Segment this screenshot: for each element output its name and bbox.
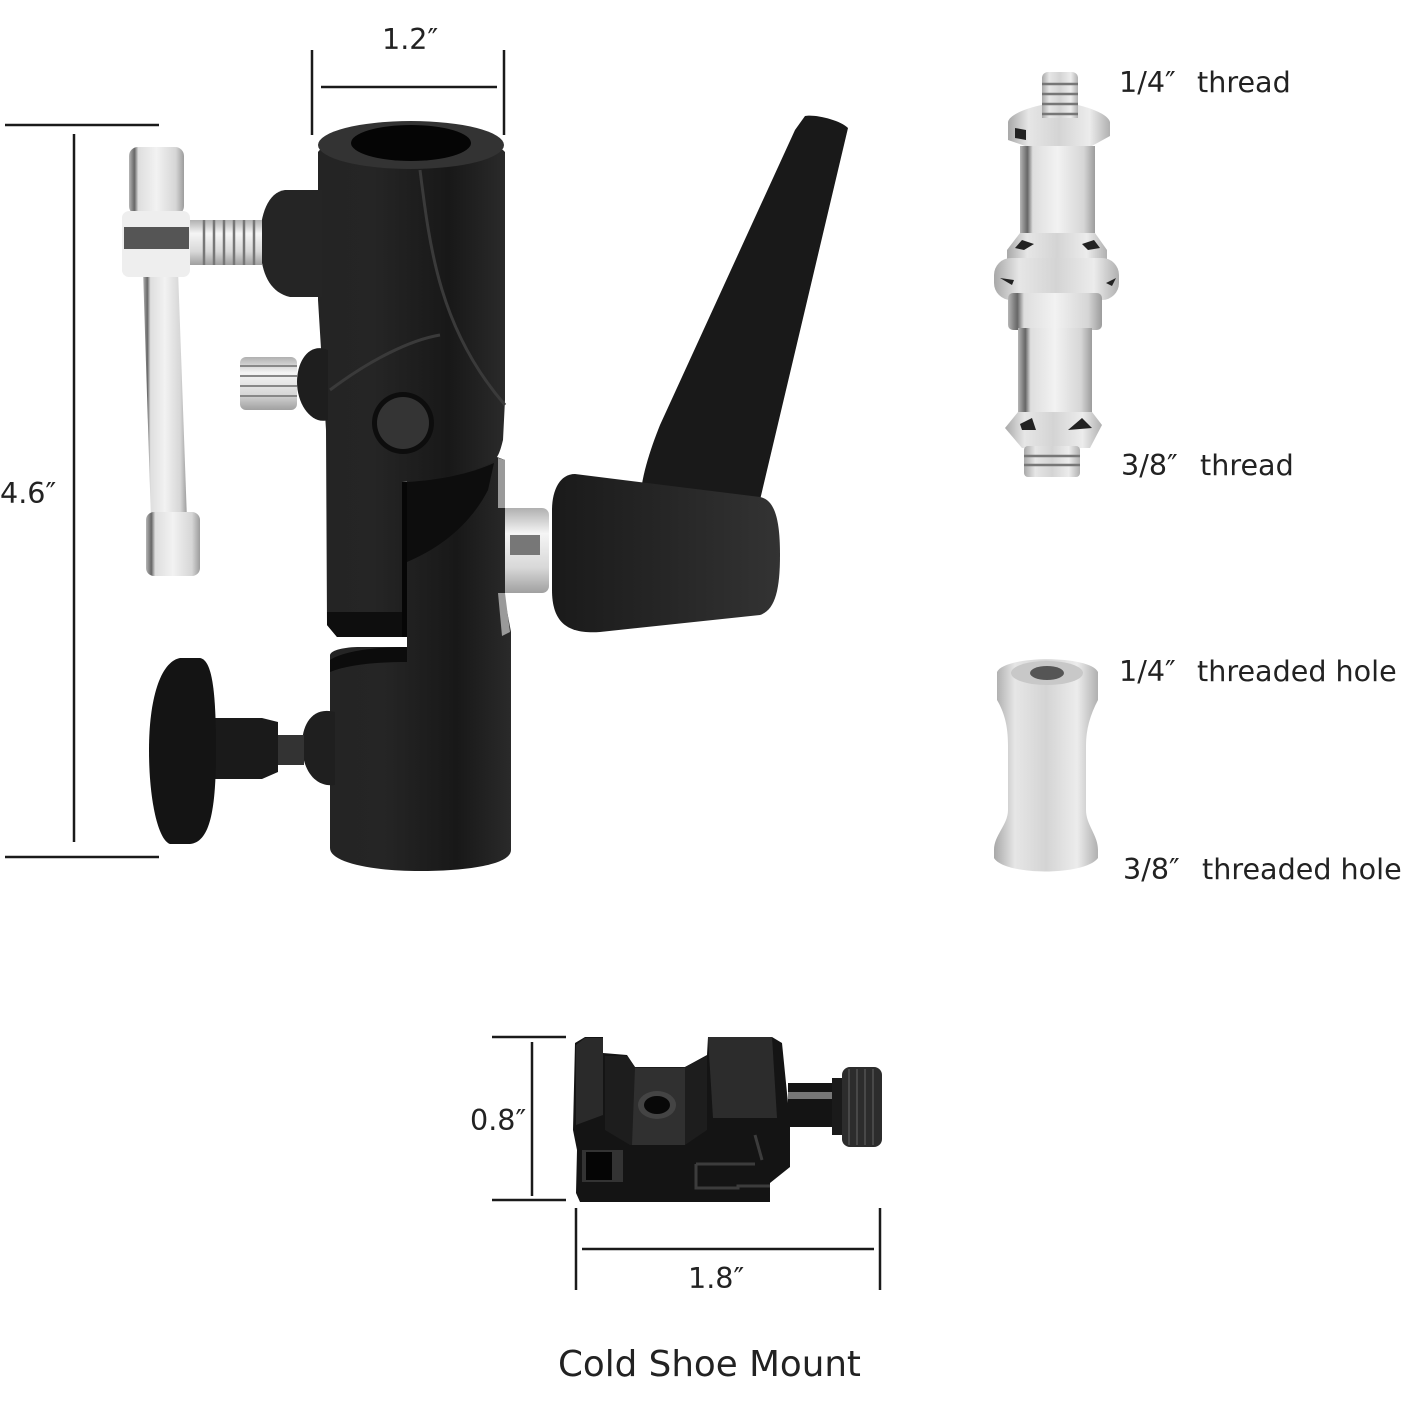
top block <box>708 1037 777 1118</box>
T-screw collar <box>122 211 190 277</box>
knob shaft <box>788 1083 834 1127</box>
middle knob boss <box>297 348 328 421</box>
dark chrome reflections <box>1000 128 1116 430</box>
left rail face <box>576 1038 603 1125</box>
adapter body <box>994 659 1098 872</box>
photo: swivel light stand bracket <box>122 116 848 871</box>
dimension: 1.8 inch width <box>576 1208 880 1295</box>
lower shaft <box>1018 328 1092 416</box>
lower screw <box>272 735 304 765</box>
label: 3/8 inch thread: thread <box>1200 448 1294 482</box>
label: 1/4 inch thread: 1/4″ <box>1119 65 1176 99</box>
label: 3/8 inch thread: 3/8″ <box>1121 448 1178 482</box>
adapter top hole <box>1011 661 1083 685</box>
lower cylinder <box>330 457 511 871</box>
bottom thread <box>1024 446 1080 477</box>
photo: 1/4 to 3/8 spigot stud <box>994 72 1119 477</box>
upper collar <box>1007 233 1107 280</box>
slot gap <box>402 482 407 637</box>
label: 3/8 inch threaded hole: threaded hole <box>1202 852 1402 886</box>
dimension: 4.6 inch height <box>0 125 159 857</box>
lower collar <box>1008 293 1102 330</box>
lower edge shadow of upper cylinder <box>327 612 402 637</box>
top thread <box>1042 72 1078 128</box>
photo: threaded adapter spigot <box>994 659 1098 872</box>
top flange <box>1008 105 1110 147</box>
T-screw bar <box>143 270 187 520</box>
label: 1/4 inch threaded hole: threaded hole <box>1197 654 1397 688</box>
top opening <box>318 121 504 169</box>
lower round knob <box>149 658 216 844</box>
shoe body <box>573 1037 790 1202</box>
knurled knob <box>842 1067 882 1147</box>
silver spacer <box>497 508 549 593</box>
lock handle lever <box>640 116 848 505</box>
threaded hole <box>638 1091 676 1119</box>
lower flange <box>1005 412 1102 448</box>
end slot <box>582 1150 623 1182</box>
label: 3/8 inch threaded hole: 3/8″ <box>1123 852 1180 886</box>
photo: cold shoe mount <box>573 1037 882 1202</box>
lower cylinder opening <box>330 647 407 672</box>
dimension: 1.2 inch width: 1.2″ <box>382 22 438 56</box>
label: 1/4 inch thread: thread <box>1197 65 1291 99</box>
dark wedge <box>407 463 494 562</box>
dimension: 0.8 inch height <box>470 1037 566 1200</box>
platform <box>605 1056 707 1145</box>
upper cylinder <box>318 137 505 637</box>
upper shaft <box>1020 146 1095 238</box>
lower knob boss <box>302 711 335 785</box>
T-screw thread <box>190 220 262 265</box>
caption: cold shoe mount: Cold Shoe Mount <box>558 1344 861 1385</box>
upper knob boss <box>260 190 322 297</box>
side hole <box>372 392 434 454</box>
T-screw bottom cap <box>146 512 200 576</box>
centre flange <box>994 258 1119 300</box>
dimension: 1.8 inch width: 1.8″ <box>688 1261 744 1295</box>
dimension: 1.2 inch width <box>312 22 504 135</box>
dimension: 0.8 inch height: 0.8″ <box>470 1103 526 1137</box>
T-screw top cap <box>129 147 184 215</box>
side notch <box>696 1135 770 1188</box>
small knurled screw <box>240 357 297 410</box>
lock handle barrel <box>552 474 780 632</box>
knob collar <box>832 1078 844 1135</box>
dimension: 4.6 inch height: 4.6″ <box>0 476 56 510</box>
label: 1/4 inch threaded hole: 1/4″ <box>1119 654 1176 688</box>
chrome bracket edge <box>498 458 510 636</box>
